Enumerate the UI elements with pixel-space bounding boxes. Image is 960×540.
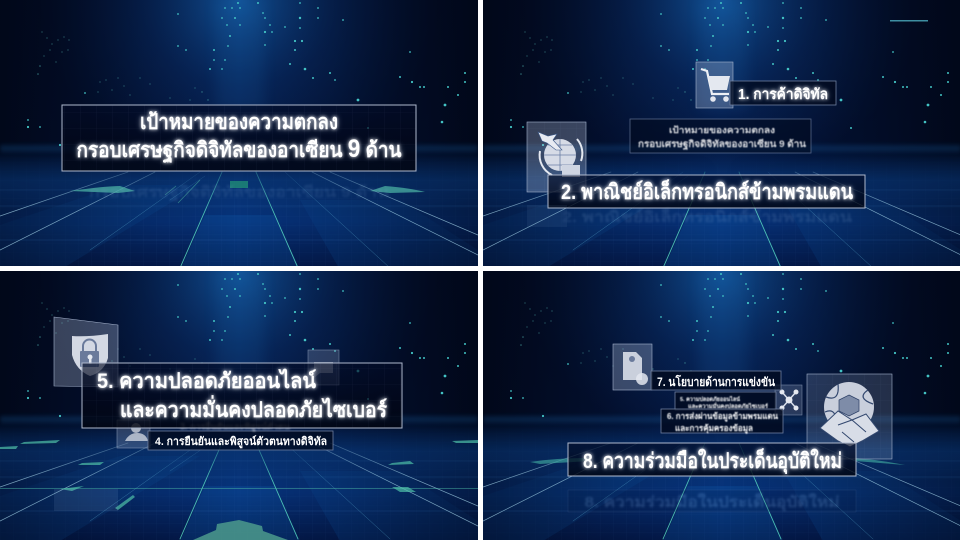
title text: เป้าหมายของความตกลง xyxy=(140,110,338,134)
title reflection: กรอบเศรษฐกิจดิจิทัลของอาเซียน 9 ด้าน xyxy=(89,183,390,202)
box: item 2: 2. พาณิชย์อิเล็กทรอนิกส์ข้ามพรมแดน xyxy=(561,178,854,204)
icon panel: shopping cart xyxy=(696,62,733,108)
box: item 2 xyxy=(548,175,865,208)
box: blurred item 5: 5. ความปลอดภัยออนไลน์ xyxy=(680,395,740,403)
icon panel: shield and lock xyxy=(54,317,118,387)
box: item 1: 1. การค้าดิจิทัล xyxy=(738,86,828,103)
small goal box: เป้าหมายของความตกลง xyxy=(669,125,775,135)
box: item 4: 4. การยืนยันและพิสูจน์ตัวตนทางดิจิทัล xyxy=(155,435,327,449)
panel: items 6, 7 and 8 xyxy=(483,271,960,540)
box: item 5: และความมั่นคงปลอดภัยไซเบอร์ xyxy=(120,394,388,422)
small goal box xyxy=(630,119,811,153)
box: item 5: 5. ความปลอดภัยออนไลน์ xyxy=(97,368,317,393)
blurred item 3 text: 3. การยืนยันและพิสูจน์ตัวตน xyxy=(180,421,291,432)
green horizon accents xyxy=(530,458,905,465)
green hexagon roof xyxy=(193,520,288,540)
box: item 6: 6. การส่งผ่านข้อมูลข้ามพรมแดน xyxy=(667,411,778,422)
icon panel: network xyxy=(775,385,802,415)
icon panel: person xyxy=(117,420,150,448)
box: item 5 xyxy=(82,363,402,428)
icon panel: chat xyxy=(308,350,339,385)
box: item 7 xyxy=(651,371,781,390)
icon panel: policy document xyxy=(613,344,652,390)
reflection xyxy=(568,490,856,512)
box: item 6 xyxy=(661,409,783,434)
box: item 7: 7. นโยบายด้านการแข่งขัน xyxy=(657,374,776,389)
box: item 6: และการคุ้มครองข้อมูล xyxy=(675,423,753,434)
panel: agreement goals title slide xyxy=(0,0,478,270)
title box xyxy=(62,105,416,171)
box: blurred item 5 xyxy=(675,392,776,410)
panel: items 1 and 2 xyxy=(483,0,960,270)
box: item 4 xyxy=(148,431,333,450)
box: blurred item 5: และความมั่นคงปลอดภัยไซเบอร์ xyxy=(688,402,768,410)
streak xyxy=(890,20,928,22)
floor reflection of shield panel xyxy=(54,489,118,511)
reflection: 8. ความร่วมมือในประเด็นอุบัติใหม่ xyxy=(584,492,840,512)
reflection xyxy=(527,205,853,227)
icon panel: globe and handshake xyxy=(807,374,892,459)
floor accents xyxy=(0,440,478,510)
title text: กรอบเศรษฐกิจดิจิทัลของอาเซียน 9 ด้าน xyxy=(76,135,402,164)
floor glow accents xyxy=(70,180,425,203)
box: item 8: 8. ความร่วมมือในประเด็นอุบัติใหม่ xyxy=(583,447,842,475)
reflection: 2. พาณิชย์อิเล็กทรอนิกส์ข้ามพรมแดน xyxy=(562,207,853,226)
icon panel: globe and plane xyxy=(527,122,586,192)
cross line xyxy=(0,488,478,489)
box: item 8 xyxy=(568,443,856,476)
title text xyxy=(76,110,402,164)
panel: items 4 and 5 xyxy=(0,271,478,540)
small goal box: กรอบเศรษฐกิจดิจิทัลของอาเซียน 9 ด้าน xyxy=(638,138,807,150)
box: item 1 xyxy=(730,81,836,105)
